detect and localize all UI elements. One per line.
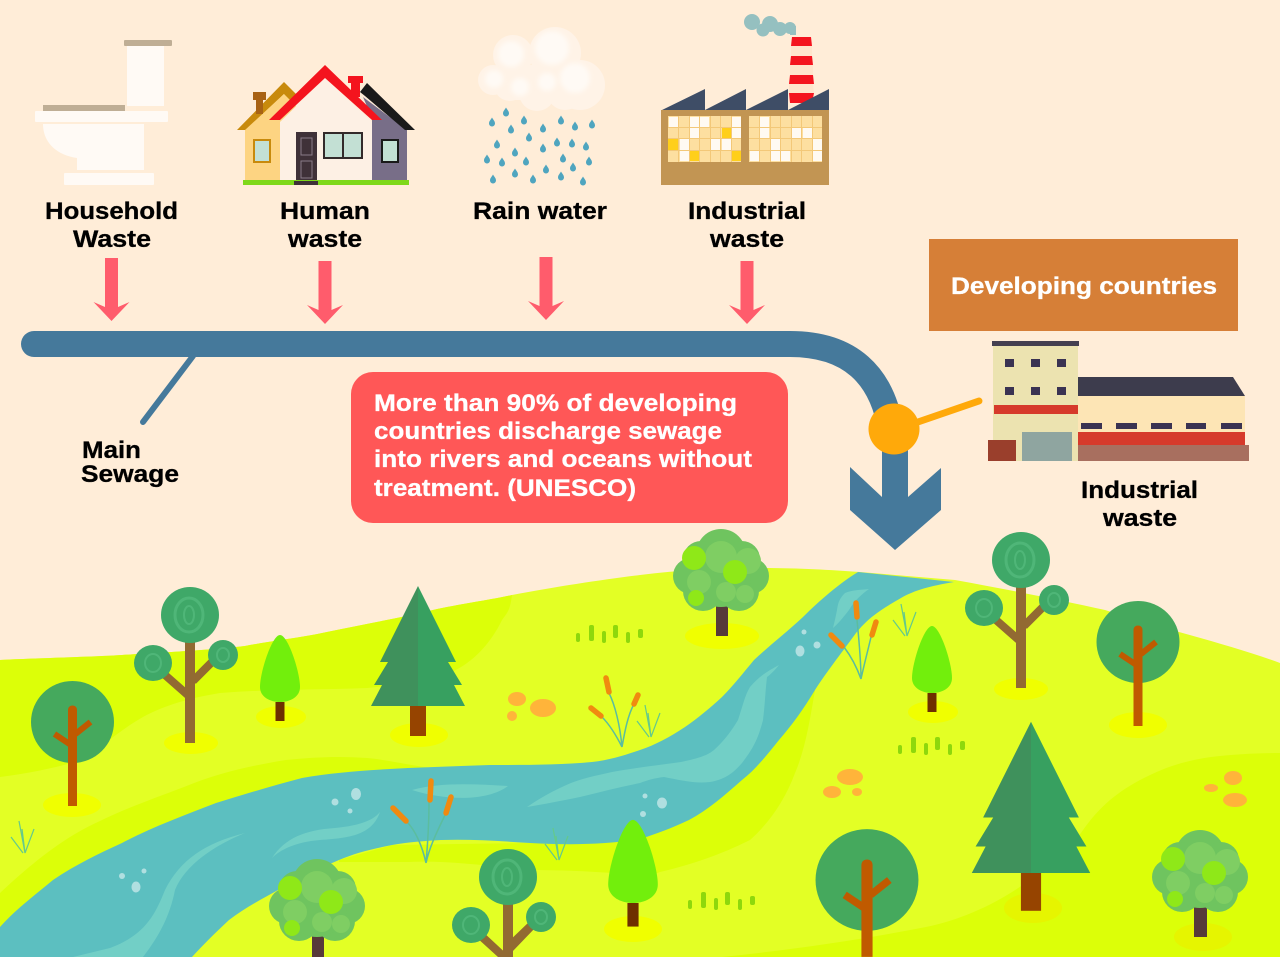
tree: fir left bbox=[371, 586, 465, 736]
label: Industrial waste right: waste bbox=[1102, 505, 1177, 532]
tree: round left bbox=[31, 681, 114, 806]
callout: statistics: More than 90% of developing bbox=[374, 390, 737, 417]
tree: bush top bbox=[673, 529, 769, 636]
callout: statistics: countries discharge sewage bbox=[374, 418, 722, 445]
label: Main Sewage: Main bbox=[82, 437, 141, 464]
label: Industrial waste right bbox=[1081, 477, 1198, 532]
label: Industrial waste: Industrial bbox=[688, 198, 806, 225]
reeds bbox=[393, 603, 876, 863]
label: Human waste bbox=[280, 198, 370, 253]
river bbox=[0, 572, 954, 957]
label: Industrial waste right: Industrial bbox=[1081, 477, 1198, 504]
tree: cone left bbox=[260, 635, 300, 721]
panel: developing countries: Developing countries bbox=[951, 273, 1217, 300]
panel: developing countries bbox=[929, 239, 1238, 331]
tree: fir large bbox=[972, 722, 1090, 911]
label: Human waste: waste bbox=[287, 226, 362, 253]
grass tufts bbox=[11, 604, 916, 860]
flowers bbox=[507, 692, 1247, 807]
label: Household Waste bbox=[45, 198, 178, 253]
tree: round large bbox=[816, 829, 918, 957]
icon: factory bbox=[661, 14, 829, 185]
callout: statistics: treatment. (UNESCO) bbox=[374, 475, 636, 502]
landscape: hill bbox=[0, 568, 1280, 957]
tree: cone large bbox=[608, 820, 658, 927]
main sewage pipe bbox=[34, 344, 891, 430]
label: Main Sewage bbox=[81, 437, 179, 488]
tree: ball right bbox=[965, 532, 1069, 688]
tree: bush right bbox=[1152, 830, 1248, 937]
label: Household Waste: Waste bbox=[73, 226, 151, 253]
arrow: discharge down bbox=[850, 450, 941, 550]
grass patches bbox=[576, 625, 965, 910]
tree: ball bottom bbox=[452, 849, 556, 957]
tree: ball left bbox=[134, 587, 238, 743]
label: Human waste: Human bbox=[280, 198, 370, 225]
icon: industrial building bbox=[988, 341, 1249, 461]
icon: house bbox=[237, 65, 415, 185]
callout: statistics bbox=[351, 372, 788, 523]
icon: rain cloud bbox=[478, 27, 605, 186]
label: Industrial waste bbox=[688, 198, 806, 253]
icon: toilet bbox=[35, 40, 172, 185]
rain drops bbox=[484, 108, 595, 186]
callout: statistics: into rivers and oceans without bbox=[374, 446, 752, 473]
arrow: human waste bbox=[307, 261, 343, 324]
arrow: rain water bbox=[528, 257, 564, 320]
junction: industrial inlet bbox=[868, 401, 979, 454]
tree: round right bbox=[1096, 601, 1180, 726]
tree: bush bottom left bbox=[269, 859, 365, 957]
arrow: industrial waste bbox=[729, 261, 765, 324]
arrow: household waste bbox=[94, 258, 130, 321]
ground shadows bbox=[43, 623, 1232, 951]
label: Rain water: Rain water bbox=[473, 198, 607, 225]
label: Industrial waste: waste bbox=[709, 226, 784, 253]
tree: cone right bbox=[912, 626, 952, 712]
label: Main Sewage: Sewage bbox=[81, 461, 179, 488]
label: Household Waste: Household bbox=[45, 198, 178, 225]
